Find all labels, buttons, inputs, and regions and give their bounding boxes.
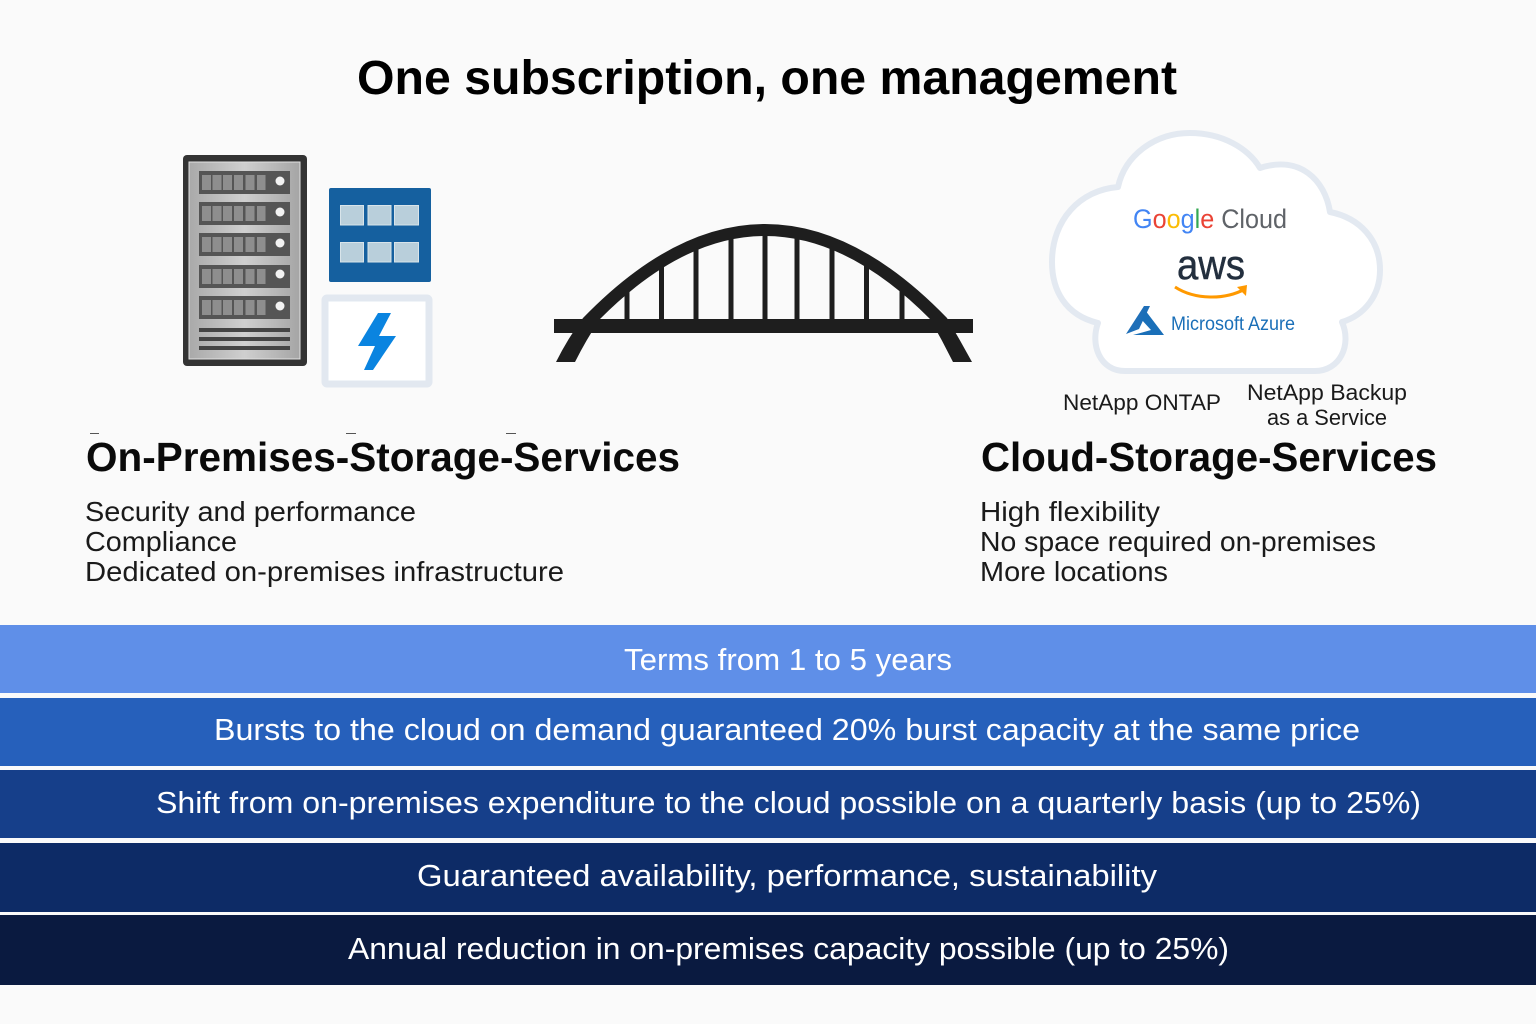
label: NetApp Backup as a Service: NetApp Backup: [1247, 380, 1407, 405]
logo: aws: aws: [1177, 241, 1245, 288]
band: guarantees: Guaranteed availability, performance, sustainability: [417, 858, 1158, 893]
band: terms: [0, 625, 1536, 693]
band: bursts: Bursts to the cloud on demand guaranteed 20% burst capacity at the same price: [214, 712, 1360, 747]
label: NetApp Backup as a Service: as a Service: [1267, 405, 1387, 430]
label: NetApp ONTAP: NetApp ONTAP: [1063, 390, 1221, 415]
icon: server rack: [183, 155, 307, 366]
text block: on-premises benefits: Compliance: [85, 526, 237, 557]
icon: arch bridge: [554, 224, 973, 362]
panel: subscription terms bands: [0, 625, 1536, 985]
panel: cloud providers: [1052, 133, 1380, 371]
logo: Microsoft Azure: [1126, 306, 1295, 335]
heading: on-premises: On-Premises-Storage-Services: [86, 434, 680, 480]
heading: cloud: Cloud-Storage-Services: [981, 434, 1437, 480]
label: NetApp Backup as a Service: [1247, 380, 1407, 430]
band: guarantees: [0, 843, 1536, 912]
band: terms: Terms from 1 to 5 years: [624, 642, 952, 677]
band: bursts: [0, 698, 1536, 766]
logo: Google Cloud: Google Cloud: [1133, 204, 1287, 234]
band: reduction: Annual reduction in on-premises capacity possible (up to 25%): [348, 931, 1229, 966]
icon: lightning tile: [325, 298, 429, 384]
panel: on-premises icons: [183, 155, 431, 384]
text block: on-premises benefits: Security and performance: [85, 496, 416, 527]
text block: cloud benefits: [980, 496, 1376, 587]
icon: storage grid tile: [329, 188, 431, 282]
text block: on-premises benefits: Dedicated on-premises infrastructure: [85, 556, 564, 587]
icon: cloud outline: [1052, 133, 1380, 371]
text block: cloud benefits: More locations: [980, 556, 1168, 587]
logo: Microsoft Azure: Microsoft Azure: [1171, 314, 1295, 335]
band: shift: Shift from on-premises expenditure to the cloud possible on a quarterly basis (up to 25%): [156, 785, 1421, 820]
text block: cloud benefits: No space required on-premises: [980, 526, 1376, 557]
band: reduction: [0, 915, 1536, 985]
text block: on-premises benefits: [85, 496, 564, 587]
title: One subscription, one management: [357, 52, 1177, 105]
band: shift: [0, 770, 1536, 838]
text block: cloud benefits: High flexibility: [980, 496, 1160, 527]
